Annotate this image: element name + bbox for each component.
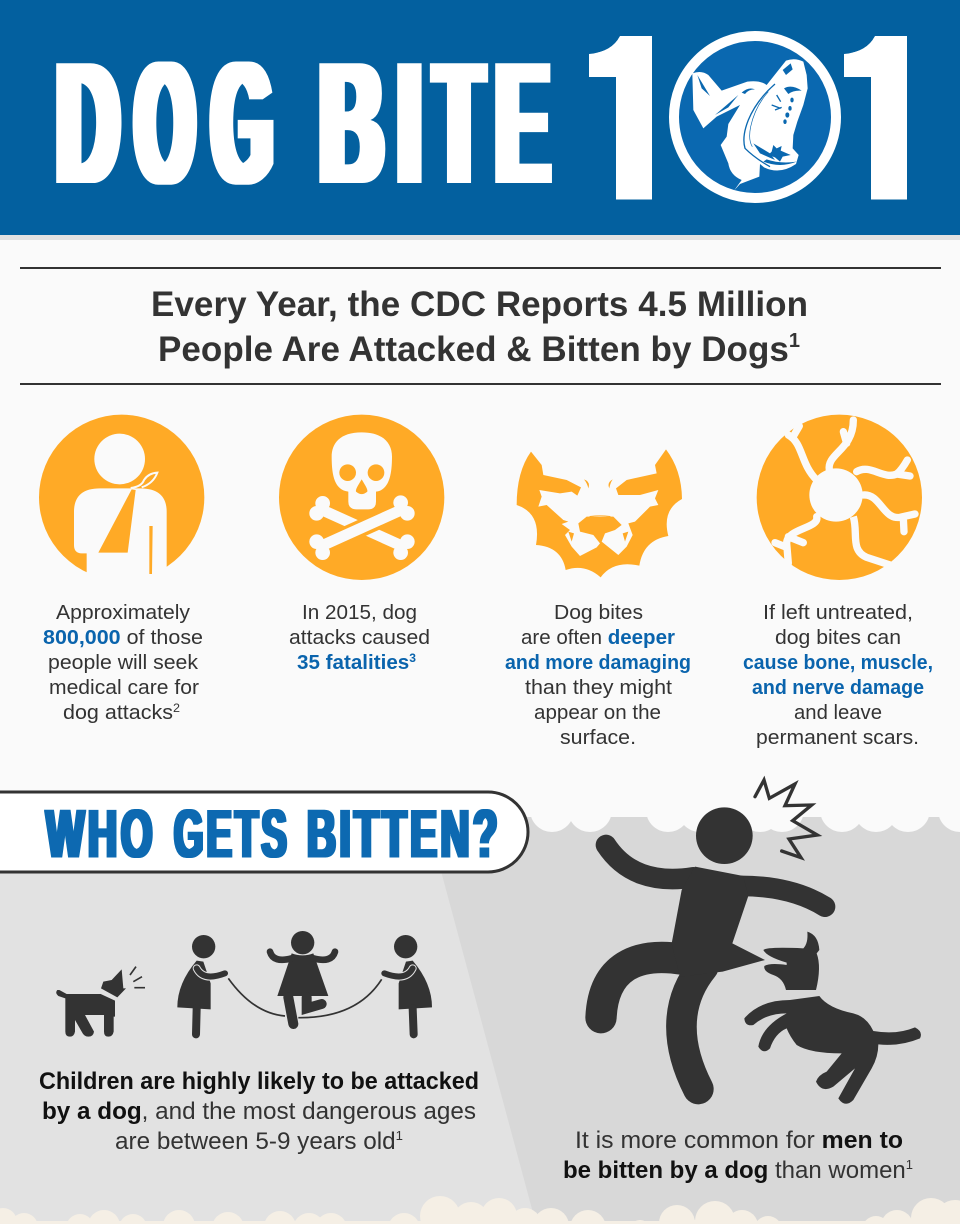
text: 35 fatalities: In 2015, dog <box>302 601 417 624</box>
text: 35 fatalities: 3 <box>409 651 416 665</box>
text: bone, muscle, nerve damage: and nerve damage <box>752 676 924 699</box>
text: 800,000: 800,000 of those <box>43 626 203 649</box>
heading: who gets bitten: WHO <box>46 796 156 872</box>
text: 800,000: 2 <box>173 701 180 715</box>
text: 800,000: medical care for <box>49 676 199 699</box>
panel: medical care stat <box>39 415 204 724</box>
text: bone, muscle, nerve damage: permanent scars. <box>756 726 919 749</box>
icon: dog biting man <box>601 780 921 1104</box>
panel: deep wounds stat <box>505 433 691 749</box>
panel: fatalities stat <box>279 415 444 674</box>
text: deeper and more damaging: surface. <box>560 726 636 749</box>
text: men more commonly bitten: be bitten by a dog than women <box>563 1157 906 1184</box>
text: children most at risk: 1 <box>396 1128 403 1143</box>
icon: snarling dog in circle <box>674 36 836 198</box>
text: children most at risk: are between 5-9 years old <box>115 1128 392 1155</box>
panel: who gets bitten background <box>0 788 960 1224</box>
title: dog bite: B <box>320 25 383 220</box>
title: dog bite: G <box>213 25 272 220</box>
text: deeper and more damaging: Dog bites <box>554 601 643 624</box>
text: 800,000: people will seek <box>48 651 199 674</box>
title: dog bite <box>57 25 548 220</box>
icon: children skipping rope <box>177 931 432 1034</box>
text: men more commonly bitten <box>563 1127 913 1184</box>
heading line 1: Every Year, the CDC Reports 4.5 Million <box>151 285 808 324</box>
text: deeper and more damaging: appear on the <box>534 701 661 724</box>
text: deeper and more damaging: than they might <box>525 676 672 699</box>
icon: person with arm sling <box>39 415 204 587</box>
panel: nerve damage stat <box>743 415 933 749</box>
panel: men <box>563 780 921 1184</box>
header banner <box>0 0 960 249</box>
text: men more commonly bitten: It is more common for men to <box>575 1127 903 1154</box>
text: children most at risk <box>39 1068 479 1155</box>
text: deeper and more damaging: are often deeper <box>521 626 675 649</box>
text: 35 fatalities: 35 fatalities <box>297 651 409 674</box>
text: 800,000 <box>43 601 203 724</box>
text: bone, muscle, nerve damage: If left untreated, <box>763 601 913 624</box>
heading line 2: 1 <box>789 330 800 352</box>
header banner: E <box>496 25 548 220</box>
heading: who gets bitten <box>46 796 501 872</box>
heading: who gets bitten: GETS <box>174 796 290 872</box>
text: 35 fatalities: attacks caused <box>289 626 430 649</box>
text: children most at risk: by a dog, and the most dangerous ages <box>42 1098 476 1125</box>
title: dog bite: I <box>398 25 420 220</box>
text: children most at risk: Children are highly likely to be attacked <box>39 1068 479 1095</box>
text: bone, muscle, nerve damage: dog bites can <box>775 626 901 649</box>
panel: children <box>39 931 479 1155</box>
heading line 2: People Are Attacked & Bitten by Dogs <box>158 330 789 369</box>
title: dog bite: T <box>436 25 482 220</box>
text: 35 fatalities <box>289 601 430 674</box>
text: bone, muscle, nerve damage <box>743 601 933 749</box>
heading: who gets bitten: BITTEN? <box>307 796 501 872</box>
title: dog bite: D <box>57 25 119 220</box>
text: 800,000: Approximately <box>56 601 191 624</box>
text: 800,000: dog attacks <box>63 701 168 724</box>
icon: barking dog <box>56 967 145 1037</box>
text: men more commonly bitten: 1 <box>906 1157 913 1172</box>
section heading pill <box>0 792 528 872</box>
icon: damaged nerve cell <box>757 415 922 580</box>
panel: cdc heading <box>20 267 941 385</box>
text: bone, muscle, nerve damage: and leave <box>794 701 882 724</box>
text: bone, muscle, nerve damage: cause bone, muscle, <box>743 651 933 674</box>
text: deeper and more damaging: and more damaging <box>505 651 691 674</box>
icon: skull and crossbones <box>279 415 444 580</box>
icon: biting dog face <box>517 433 682 577</box>
text: deeper and more damaging <box>505 601 691 749</box>
title: dog bite: O <box>136 25 194 220</box>
bottom cloud border <box>0 1196 960 1224</box>
